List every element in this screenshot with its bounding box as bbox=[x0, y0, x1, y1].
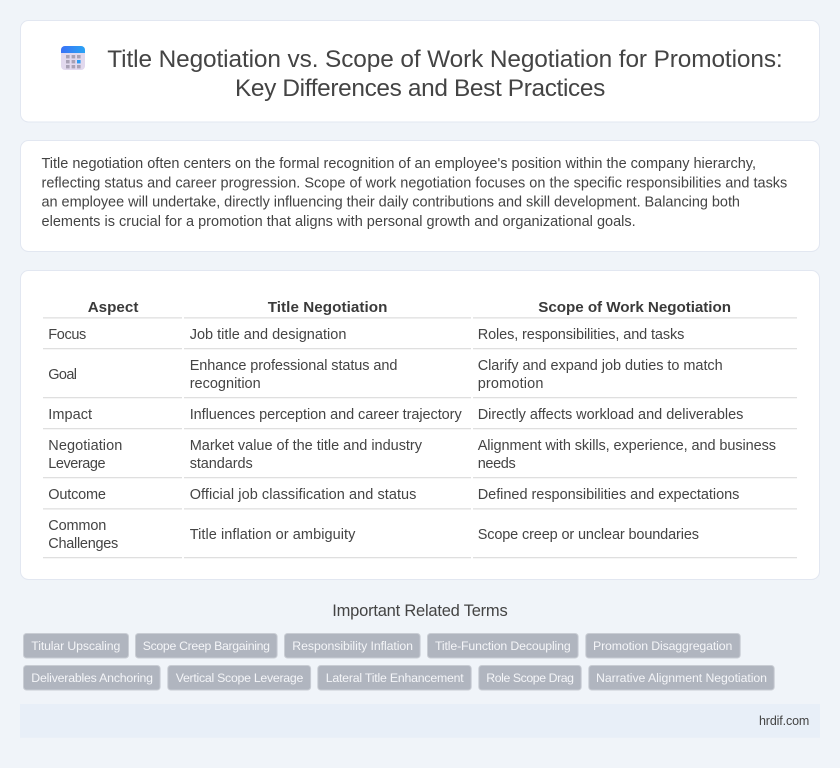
row: outcome bbox=[43, 487, 797, 510]
row: common challenges: Challenges bbox=[48, 536, 118, 552]
table header row: Aspect bbox=[88, 299, 138, 316]
panel: intro paragraph bbox=[20, 140, 820, 252]
row: negotiation leverage: Negotiation bbox=[48, 438, 122, 454]
row: common challenges bbox=[43, 518, 797, 558]
panel: related term chips bbox=[24, 634, 774, 690]
chip: title-function decoupling bbox=[428, 634, 578, 658]
row: goal: recognition bbox=[190, 376, 261, 392]
footer bbox=[20, 704, 820, 738]
panel: comparison table bbox=[20, 270, 820, 580]
chip: titular upscaling: Titular Upscaling bbox=[31, 639, 120, 653]
intro text: elements is crucial for a promotion that aligns with personal growth and organizational goals. bbox=[42, 214, 636, 230]
row: goal: promotion bbox=[478, 376, 543, 392]
chip: scope creep bargaining: Scope Creep Bargaining bbox=[143, 639, 270, 653]
row: negotiation leverage: Market value of the title and industry bbox=[190, 438, 423, 454]
chip: vertical scope leverage bbox=[168, 666, 311, 690]
chip: role scope drag bbox=[479, 666, 581, 690]
row: impact bbox=[43, 407, 797, 429]
row: impact: Influences perception and career trajectory bbox=[190, 407, 462, 423]
chip: lateral title enhancement: Lateral Title Enhancement bbox=[326, 671, 464, 685]
chip: responsibility inflation: Responsibility Inflation bbox=[292, 639, 413, 653]
table header row bbox=[43, 299, 797, 318]
chip: narrative alignment negotiation: Narrative Alignment Negotiation bbox=[596, 671, 767, 685]
chip: title-function decoupling: Title-Function Decoupling bbox=[435, 639, 571, 653]
table header row: Title Negotiation bbox=[268, 299, 387, 316]
intro text bbox=[42, 156, 787, 230]
row: common challenges: Common bbox=[48, 518, 106, 534]
title: Title Negotiation vs. Scope of Work Negotiation for Promotions: bbox=[107, 46, 783, 73]
chip: promotion disaggregation bbox=[586, 634, 740, 658]
table header row: Scope of Work Negotiation bbox=[538, 299, 731, 316]
row: negotiation leverage: Leverage bbox=[48, 456, 106, 472]
row: focus: Roles, responsibilities, and tasks bbox=[478, 327, 684, 343]
intro text: reflecting status and career progression. Scope of work negotiation focuses on the specific responsibilities and tasks bbox=[42, 175, 787, 191]
row: common challenges: Title inflation or ambiguity bbox=[190, 527, 356, 543]
chip: scope creep bargaining bbox=[136, 634, 277, 658]
row: negotiation leverage: Alignment with skills, experience, and business bbox=[478, 438, 776, 454]
row: negotiation leverage: needs bbox=[478, 456, 516, 472]
row: outcome: Outcome bbox=[48, 487, 106, 503]
chip: responsibility inflation bbox=[284, 634, 420, 658]
chip: promotion disaggregation: Promotion Disaggregation bbox=[593, 639, 732, 653]
row: outcome: Defined responsibilities and expectations bbox=[478, 487, 739, 503]
row: focus bbox=[43, 327, 797, 349]
row: goal: Goal bbox=[48, 367, 77, 383]
chip: titular upscaling bbox=[24, 634, 128, 658]
row: focus: Focus bbox=[48, 327, 86, 343]
chip: deliverables anchoring bbox=[24, 666, 160, 690]
icon: calendar bbox=[61, 46, 85, 70]
row: negotiation leverage: standards bbox=[190, 456, 253, 472]
row: focus: Job title and designation bbox=[190, 327, 346, 343]
chip: narrative alignment negotiation bbox=[589, 666, 774, 690]
row: outcome: Official job classification and status bbox=[190, 487, 416, 503]
footer: hrdif.com bbox=[759, 714, 809, 728]
heading: important related terms: Important Related Terms bbox=[332, 602, 508, 620]
row: negotiation leverage bbox=[43, 438, 797, 478]
chip: deliverables anchoring: Deliverables Anchoring bbox=[31, 671, 153, 685]
row: impact: Directly affects workload and deliverables bbox=[478, 407, 743, 423]
row: impact: Impact bbox=[48, 407, 92, 423]
title bbox=[107, 46, 783, 102]
intro text: Title negotiation often centers on the formal recognition of an employee's position within the company hierarchy, bbox=[42, 156, 756, 172]
row: goal bbox=[43, 358, 797, 398]
chip: role scope drag: Role Scope Drag bbox=[486, 671, 574, 685]
intro text: an employee will undertake, directly influencing their daily contributions and skill development. Balancing both bbox=[42, 195, 740, 211]
chip: vertical scope leverage: Vertical Scope Leverage bbox=[176, 671, 303, 685]
title: Key Differences and Best Practices bbox=[235, 75, 605, 102]
row: goal: Clarify and expand job duties to match bbox=[478, 358, 723, 374]
chip: lateral title enhancement bbox=[318, 666, 471, 690]
row: goal: Enhance professional status and bbox=[190, 358, 397, 374]
row: common challenges: Scope creep or unclear boundaries bbox=[478, 527, 699, 543]
panel: header bbox=[20, 20, 820, 122]
